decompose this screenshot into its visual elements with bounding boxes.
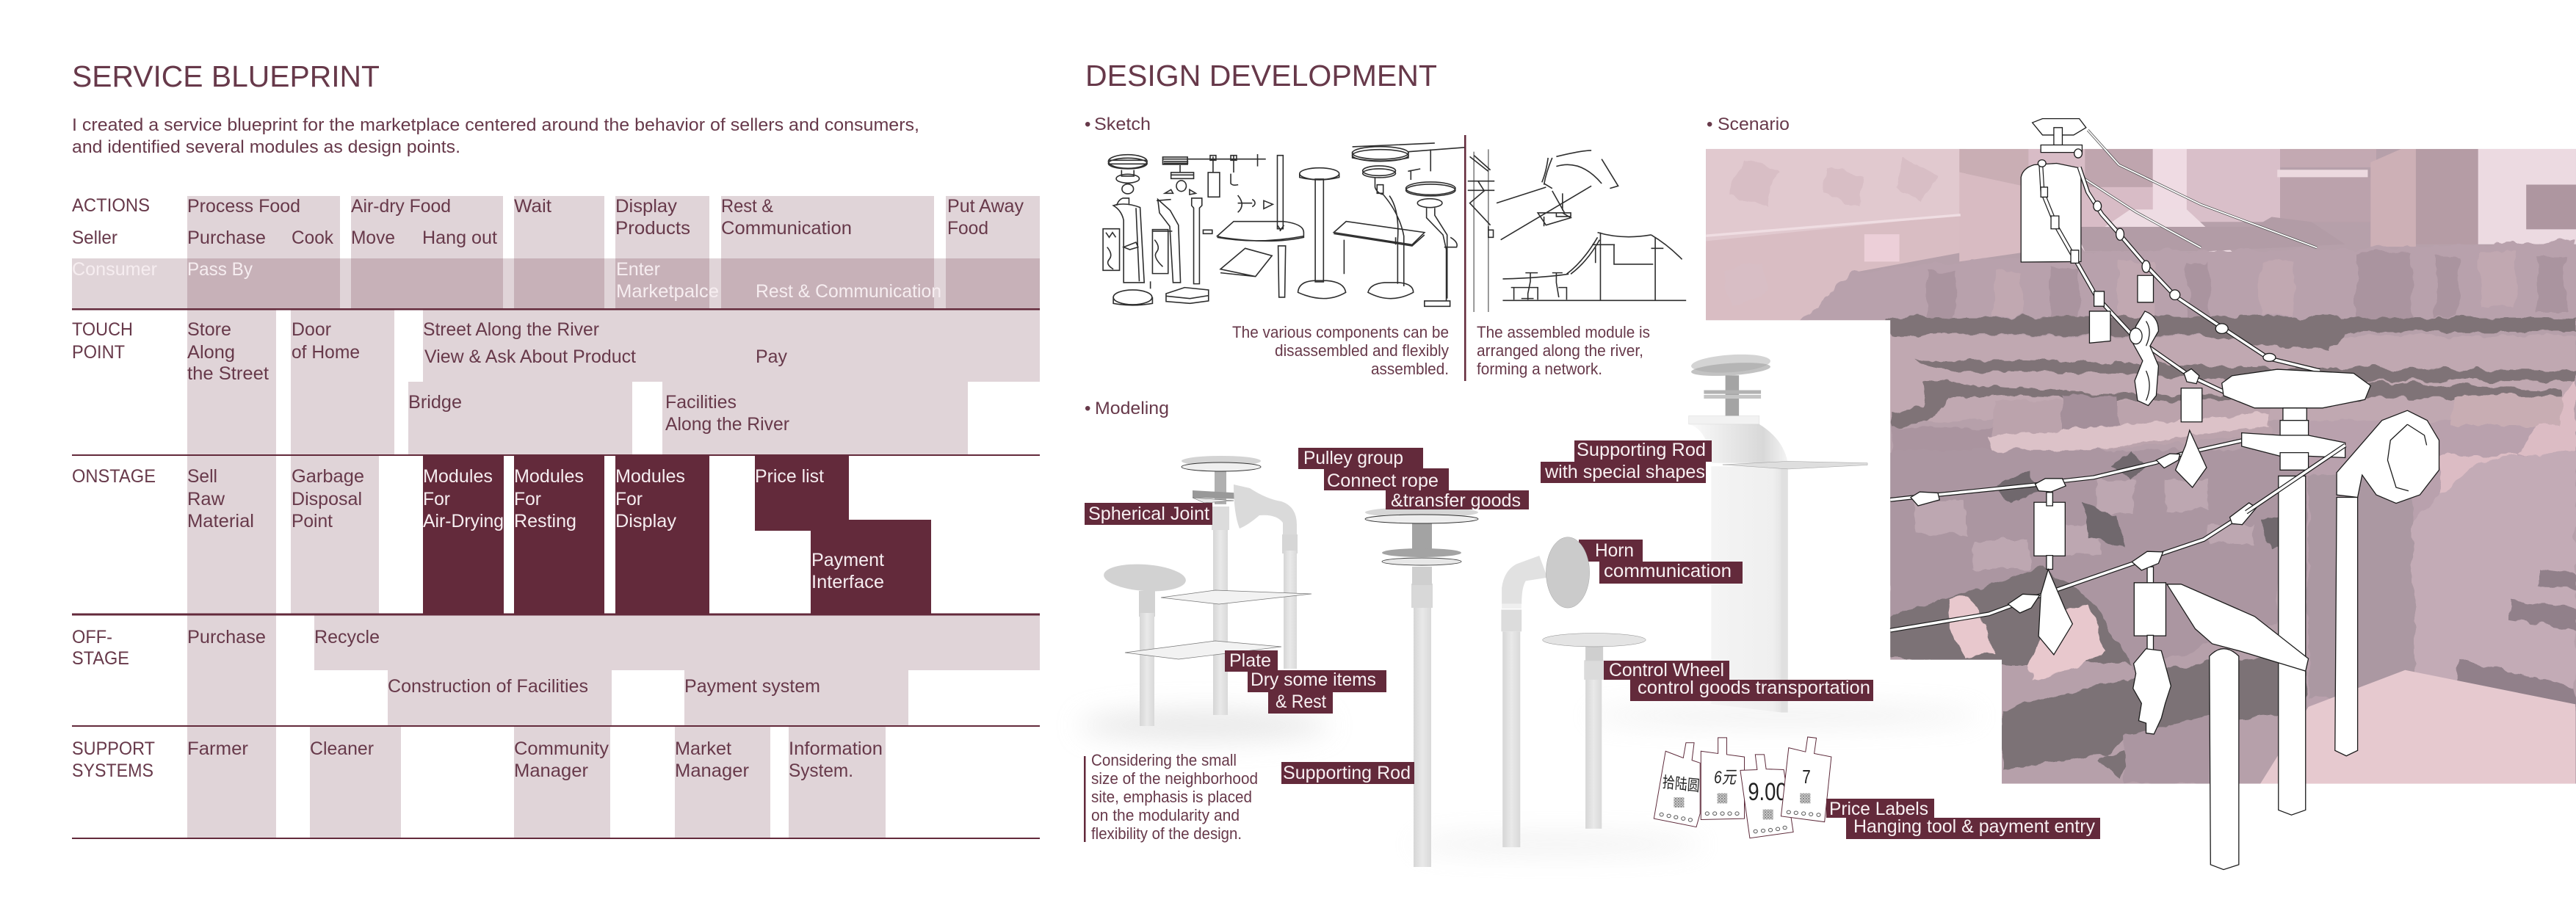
row: touch point: Pay: [756, 346, 787, 367]
label: horn: Horn: [1595, 540, 1634, 561]
row: support systems: SYSTEMS: [72, 761, 153, 781]
row: onstage: Disposal: [292, 489, 362, 509]
row: actions: Rest &: [721, 196, 773, 217]
row: touch point: of Home: [292, 342, 360, 363]
hanging tags: [2034, 275, 2207, 734]
tag: nine: 9.00: [1748, 777, 1787, 806]
label: pulley group: Pulley group: [1303, 448, 1403, 468]
tag: sixteen yuan: [1654, 743, 1701, 827]
tag: six yuan: [1701, 738, 1745, 819]
row: actions: Purchase: [187, 228, 266, 248]
label: horn: communication: [1604, 561, 1732, 581]
row: actions: Seller: [72, 228, 117, 248]
note: modularity statement: [1084, 751, 1258, 843]
row: actions: Display: [615, 196, 677, 217]
note: modularity statement: site, emphasis is placed: [1091, 788, 1252, 806]
caption: components: disassembled and flexibly: [1275, 341, 1449, 360]
hammer module: [2167, 584, 2309, 870]
label: control wheel: control goods transportation: [1638, 678, 1870, 698]
row: actions: Enter: [616, 259, 660, 280]
row: support systems: Information: [789, 738, 883, 759]
label: supporting rod with special shapes: Supporting Rod: [1577, 440, 1706, 460]
heading: design development: DESIGN DEVELOPMENT: [1085, 59, 1437, 92]
caption: network: arranged along the river,: [1477, 341, 1643, 360]
row: onstage: Price list: [755, 466, 824, 487]
subheading: sketch: •: [1085, 115, 1090, 134]
floor shadow: [1079, 707, 1983, 853]
row: touch point: TOUCH: [72, 319, 133, 340]
hanging board: [2021, 163, 2081, 262]
tag: sixteen yuan: 拾陆圆: [1662, 774, 1701, 795]
row: off-stage: OFF-: [72, 627, 112, 647]
row: touch point: Along the River: [665, 414, 789, 435]
price label tags: [1654, 737, 1831, 838]
row: support systems: SUPPORT: [72, 738, 155, 759]
label: plate: Dry some items: [1251, 669, 1376, 690]
label: spherical joint: Spherical Joint: [1088, 504, 1209, 524]
caption: components: assembled.: [1371, 360, 1449, 378]
intro text block: [72, 115, 919, 157]
row: touch point: the Street: [187, 363, 269, 384]
row: support systems: System.: [789, 761, 853, 781]
label: price labels: [1826, 799, 2100, 839]
row: onstage: Display: [615, 511, 676, 531]
row: actions: Cook: [292, 228, 333, 248]
row: actions: Hang out: [422, 228, 497, 248]
row: actions: Move: [351, 228, 395, 248]
model: horn on rod: [1501, 537, 1590, 847]
row: touch point: Store: [187, 319, 231, 340]
label: pulley group: Connect rope: [1327, 471, 1439, 491]
row: support systems: Community: [514, 738, 609, 759]
row: touch point: Door: [292, 319, 331, 340]
row: onstage: Material: [187, 511, 254, 531]
label: price labels: Hanging tool & payment entry: [1853, 816, 2095, 837]
row: touch point: View & Ask About Product: [424, 346, 636, 367]
row: actions: Communication: [721, 218, 852, 239]
caption: components: The various components can be: [1232, 323, 1449, 341]
row: onstage: Modules: [423, 466, 493, 487]
intro text block: and identified several modules as design points.: [72, 137, 460, 157]
caption: network: forming a network.: [1477, 360, 1602, 378]
row: support systems: Manager: [514, 761, 588, 781]
row: onstage: For: [615, 489, 643, 509]
label: price labels: Price Labels: [1829, 799, 1928, 819]
row: off-stage: STAGE: [72, 648, 129, 669]
row: touch point: Facilities: [665, 392, 737, 413]
subheading: scenario: •: [1707, 115, 1712, 134]
row: onstage: Air-Drying: [423, 511, 504, 531]
subheading: modeling: •: [1085, 399, 1090, 418]
caption: network: [1477, 323, 1650, 378]
row: touch point: POINT: [72, 342, 125, 363]
heading: service blueprint: SERVICE BLUEPRINT: [72, 59, 380, 93]
row: onstage: [72, 455, 931, 614]
model: assembled cluster: [1103, 456, 1311, 726]
model: supporting rod with pulley group: [1365, 507, 1478, 867]
label: pulley group: &transfer goods: [1391, 490, 1521, 511]
row: actions: Marketpalce: [616, 281, 719, 302]
row: off-stage: Payment system: [684, 676, 820, 697]
row: actions: Pass By: [187, 259, 253, 280]
row: touch point: Along: [187, 342, 235, 363]
label: horn: [1579, 540, 1743, 584]
panel: service blueprint table: [72, 195, 1040, 839]
module head and crossbar: [2222, 369, 2370, 815]
row: actions: ACTIONS: [72, 195, 150, 216]
row: onstage: ONSTAGE: [72, 466, 156, 487]
rope lines: [1890, 130, 2345, 631]
subheading: modeling: Modeling: [1095, 399, 1169, 418]
row: onstage: Garbage: [292, 466, 364, 487]
row: touch point: Bridge: [408, 392, 462, 413]
row: actions: Process Food: [187, 196, 300, 217]
label: plate: & Rest: [1276, 692, 1326, 712]
row: support systems: Cleaner: [310, 738, 374, 759]
scenario line-art overlay: modules, ropes and hanging goods: [1890, 119, 2439, 870]
label: plate: [1225, 650, 1386, 714]
scenario photo: tinted riverside market: [1689, 133, 2576, 798]
row: onstage: Point: [292, 511, 333, 531]
tag: six yuan: 6元: [1714, 767, 1737, 787]
label: supporting rod with special shapes: [1541, 440, 1712, 483]
label: pulley group: [1298, 448, 1529, 511]
horn: [2337, 410, 2439, 504]
sketch: module network: [1468, 149, 1686, 312]
label: supporting rod: Supporting Rod: [1283, 763, 1411, 783]
caption: network: The assembled module is: [1477, 323, 1650, 341]
row: off-stage: [72, 614, 1040, 726]
model: control wheel: [1543, 634, 1646, 829]
top pulley: [2033, 119, 2086, 153]
row: onstage: Modules: [615, 466, 685, 487]
row: actions: Air-dry Food: [351, 196, 451, 217]
row: onstage: Modules: [514, 466, 584, 487]
row: onstage: For: [423, 489, 450, 509]
row: actions: Put Away: [947, 196, 1024, 217]
row: onstage: Raw: [187, 489, 225, 509]
intro text block: I created a service blueprint for the marketplace centered around the behavior of sellers and consumers,: [72, 115, 919, 135]
row: onstage: Resting: [514, 511, 576, 531]
chain over board: [2041, 163, 2088, 257]
tag: nine: [1740, 755, 1793, 838]
rope collars: [1911, 149, 2276, 613]
model: supporting rod with special shapes: [1689, 352, 1867, 712]
label: control wheel: Control Wheel: [1609, 660, 1724, 680]
row: actions: Rest & Communication: [756, 281, 941, 302]
note: modularity statement: on the modularity and: [1091, 806, 1240, 824]
label: plate: Plate: [1229, 650, 1271, 671]
row: onstage: Sell: [187, 466, 217, 487]
row: touch point: [72, 309, 1040, 455]
tag: seven: [1781, 737, 1831, 822]
row: off-stage: Construction of Facilities: [388, 676, 588, 697]
row: onstage: Interface: [811, 572, 884, 592]
row: actions: Food: [947, 218, 988, 239]
subheading: scenario: Scenario: [1718, 115, 1790, 134]
row: support systems: [72, 726, 886, 838]
tag: seven: 7: [1802, 766, 1811, 787]
note: modularity statement: flexibility of the design.: [1091, 824, 1242, 843]
row: support systems: Manager: [675, 761, 749, 781]
row: actions: Products: [615, 218, 690, 239]
caption: components: [1232, 323, 1449, 378]
rope over crossbar: [2246, 446, 2345, 512]
row: touch point: Street Along the River: [423, 319, 599, 340]
row: actions: Wait: [514, 196, 551, 217]
row: actions: Consumer: [72, 259, 157, 280]
sketch: disassembled components: [1103, 143, 1466, 306]
row: support systems: Farmer: [187, 738, 248, 759]
row: off-stage: Purchase: [187, 627, 266, 647]
note: modularity statement: Considering the small: [1091, 751, 1237, 769]
row: onstage: For: [514, 489, 541, 509]
note: modularity statement: size of the neighborhood: [1091, 769, 1258, 788]
divider line: [1464, 135, 1466, 381]
label: control wheel: [1604, 660, 1873, 701]
row: actions: [72, 195, 1040, 309]
label: supporting rod with special shapes: with special shapes: [1544, 462, 1705, 482]
row: support systems: Market: [675, 738, 731, 759]
row: onstage: Payment: [811, 550, 884, 570]
row: off-stage: Recycle: [314, 627, 380, 647]
subheading: sketch: Sketch: [1094, 115, 1151, 134]
